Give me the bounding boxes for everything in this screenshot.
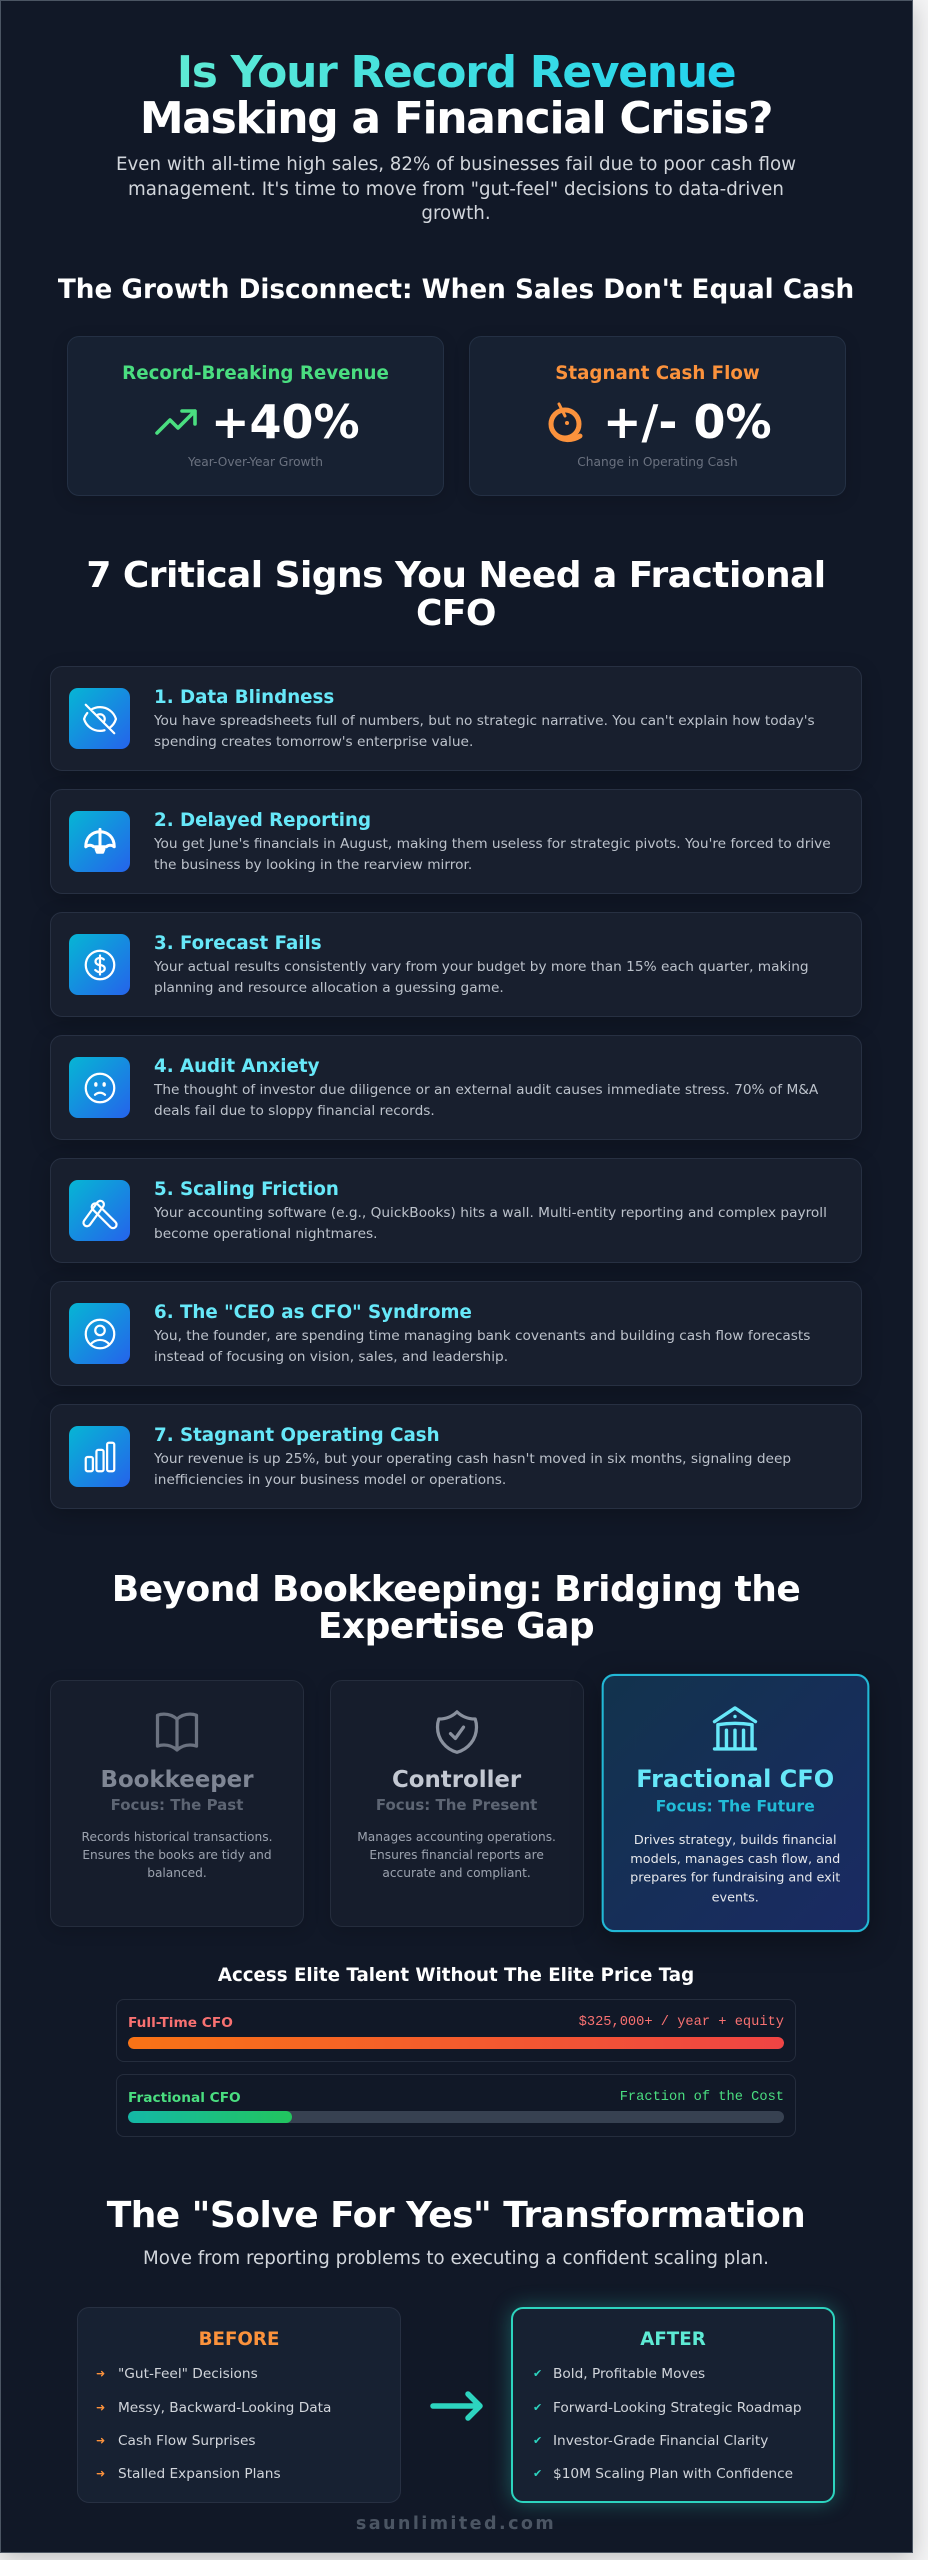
icon: dollar circle [69,934,130,995]
panel: stagnant cash flow [469,336,846,496]
sign 3 text [154,958,809,996]
after list: ✔ [533,2467,542,2480]
panel: fractional cfo highlighted [602,1673,869,1932]
panel: sign 2 [50,789,862,894]
sign 5 title: 5. Scaling Friction [154,1179,339,1200]
controller text [357,1830,556,1880]
icon: shield check [436,1710,478,1754]
panel: after [511,2307,835,2503]
full-time bar track [128,2037,784,2049]
before list: ➜ [96,2367,105,2380]
icon: bank building [712,1706,758,1751]
sign 2 title: 2. Delayed Reporting [154,810,371,831]
controller text: Ensures financial reports are [369,1848,544,1862]
sign 4 text [154,1082,818,1119]
icon: eye slash [69,688,130,749]
before list: ➜ [96,2434,105,2447]
before list [96,2366,331,2482]
sign 6 title: 6. The "CEO as CFO" Syndrome [154,1302,472,1323]
after list: Forward-Looking Strategic Roadmap [553,2400,802,2416]
sign 7 text: inefficiencies in your business model or operations. [154,1472,506,1488]
heading: beyond bookkeeping: Expertise Gap [318,1606,594,1647]
sign 1 text: spending creates tomorrow's enterprise value. [154,734,473,750]
footer url: saunlimited.com [356,2514,556,2534]
title: Masking a Financial Crisis? [140,93,772,144]
cash flow caption: Change in Operating Cash [577,455,738,469]
panel: sign 3 [50,912,862,1017]
fractional cfo text [630,1832,841,1904]
fractional cfo title: Fractional CFO [636,1766,834,1793]
heading: beyond bookkeeping [112,1569,800,1647]
panel: record-breaking revenue [67,336,444,496]
panel: sign 1 [50,666,862,771]
sign 5 text [154,1204,827,1242]
full-time cost: $325,000+ / year + equity [579,2015,784,2030]
controller title: Controller [392,1767,521,1793]
sign 5 text: Your accounting software (e.g., QuickBooks) hits a wall. Multi-entity reporting and complex payroll [154,1204,827,1220]
fractional cfo focus: Focus: The Future [656,1796,815,1815]
transformation subtitle: Move from reporting problems to executing a confident scaling plan. [143,2248,769,2269]
sign 2 text: the business by looking in the rearview mirror. [154,857,472,873]
sign 7 text [154,1450,791,1488]
before heading: BEFORE [199,2329,279,2350]
panel: sign 4 [50,1035,862,1140]
bookkeeper text: balanced. [147,1866,207,1880]
before list: Messy, Backward-Looking Data [118,2400,331,2416]
after list: Investor-Grade Financial Clarity [553,2433,768,2449]
arrow: before to after [430,2391,483,2421]
subtitle text: management. It's time to move from "gut-feel" decisions to data-driven [128,179,784,200]
fractional cfo text: prepares for fundraising and exit [630,1870,841,1885]
before list: "Gut-Feel" Decisions [118,2366,258,2382]
controller text: Manages accounting operations. [357,1830,556,1844]
after heading: AFTER [640,2329,706,2350]
bookkeeper text [82,1830,272,1880]
sign 7 title: 7. Stagnant Operating Cash [154,1425,440,1446]
sign 1 title: 1. Data Blindness [154,687,334,708]
sign 1 text [154,712,815,750]
after list: $10M Scaling Plan with Confidence [553,2466,793,2482]
cash flow card title: Stagnant Cash Flow [555,363,760,384]
heading: solve for yes: The "Solve For Yes" Transformation [107,2195,805,2236]
controller focus: Focus: The Present [376,1796,537,1814]
fractional cfo text: Drives strategy, builds financial [634,1832,837,1847]
before list: ➜ [96,2401,105,2414]
subtitle text [116,154,796,224]
sign 6 text: You, the founder, are spending time managing bank covenants and building cash flow forecasts [154,1328,810,1344]
before list: Cash Flow Surprises [118,2433,256,2449]
sign 2 text: You get June's financials in August, making them useless for strategic pivots. You're forced to drive [154,836,831,852]
before list: ➜ [96,2467,105,2480]
after list: ✔ [533,2401,542,2414]
panel: sign 7 [50,1404,862,1509]
sign 4 text: The thought of investor due diligence or an external audit causes immediate stress. 70% of M&A [154,1082,818,1098]
icon: open book [156,1712,198,1752]
bookkeeper text: Ensures the books are tidy and [82,1848,272,1862]
icon: frown face [69,1057,130,1118]
sign 3 text: Your actual results consistently vary from your budget by more than 15% each quarter, making [154,958,809,974]
panel: sign 5 [50,1158,862,1263]
panel: before [77,2307,401,2503]
panel: bookkeeper [50,1680,304,1927]
bookkeeper focus: Focus: The Past [111,1796,243,1814]
icon: stalled clock [548,402,582,442]
cost bar: full-time cfo [116,1999,796,2062]
heading: elite talent: Access Elite Talent Without The Elite Price Tag [218,1965,694,1986]
bookkeeper title: Bookkeeper [100,1767,253,1793]
sign 3 text: planning and resource allocation a guessing game. [154,980,504,996]
icon: bar chart [69,1426,130,1487]
heading: growth disconnect: The Growth Disconnect: When Sales Don't Equal Cash [58,275,854,305]
heading: beyond bookkeeping: Beyond Bookkeeping: Bridging the [112,1569,800,1610]
revenue figure: +40% [211,395,360,449]
sign 2 text [154,836,831,873]
cash flow figure: +/- 0% [603,395,772,449]
heading: seven critical signs: CFO [416,593,496,634]
sign 5 text: become operational nightmares. [154,1226,378,1242]
subtitle text: Even with all-time high sales, 82% of businesses fail due to poor cash flow [116,154,796,175]
after list: ✔ [533,2434,542,2447]
icon: user circle [69,1303,130,1364]
sign 1 text: You have spreadsheets full of numbers, but no strategic narrative. You can't explain how today's [154,712,815,728]
sign 6 text: instead of focusing on vision, sales, and leadership. [154,1349,508,1365]
icon: crossed capsules [69,1180,130,1241]
cost bar: fractional cfo [116,2074,796,2137]
after list: ✔ [533,2367,542,2380]
title [140,47,772,144]
heading: seven critical signs: 7 Critical Signs You Need a Fractional [86,555,826,596]
fractional cost: Fraction of the Cost [620,2090,784,2105]
revenue caption: Year-Over-Year Growth [188,455,323,469]
controller text: accurate and compliant. [382,1866,531,1880]
fractional cfo text: models, manages cash flow, and [630,1851,840,1866]
sign 7 text: Your revenue is up 25%, but your operating cash hasn't moved in six months, signaling deep [154,1450,791,1466]
revenue card title: Record-Breaking Revenue [122,363,389,384]
sign 4 title: 4. Audit Anxiety [154,1056,320,1077]
sign 4 text: deals fail due to sloppy financial records. [154,1103,435,1119]
fractional cfo text: events. [712,1889,759,1904]
icon: dome gauge [69,811,130,872]
panel: controller [330,1680,584,1927]
bookkeeper text: Records historical transactions. [82,1830,272,1844]
before list: Stalled Expansion Plans [118,2466,281,2482]
heading: seven critical signs [86,555,826,634]
sign 6 text [154,1328,810,1365]
fractional label: Fractional CFO [128,2090,241,2106]
fractional bar track [128,2111,784,2123]
sign 3 title: 3. Forecast Fails [154,933,322,954]
panel: sign 6 [50,1281,862,1386]
title: Is Your Record Revenue [177,47,735,98]
subtitle text: growth. [421,203,491,224]
after list [533,2366,802,2482]
icon: trending up arrow [155,409,197,435]
after list: Bold, Profitable Moves [553,2366,705,2382]
full-time label: Full-Time CFO [128,2015,233,2031]
